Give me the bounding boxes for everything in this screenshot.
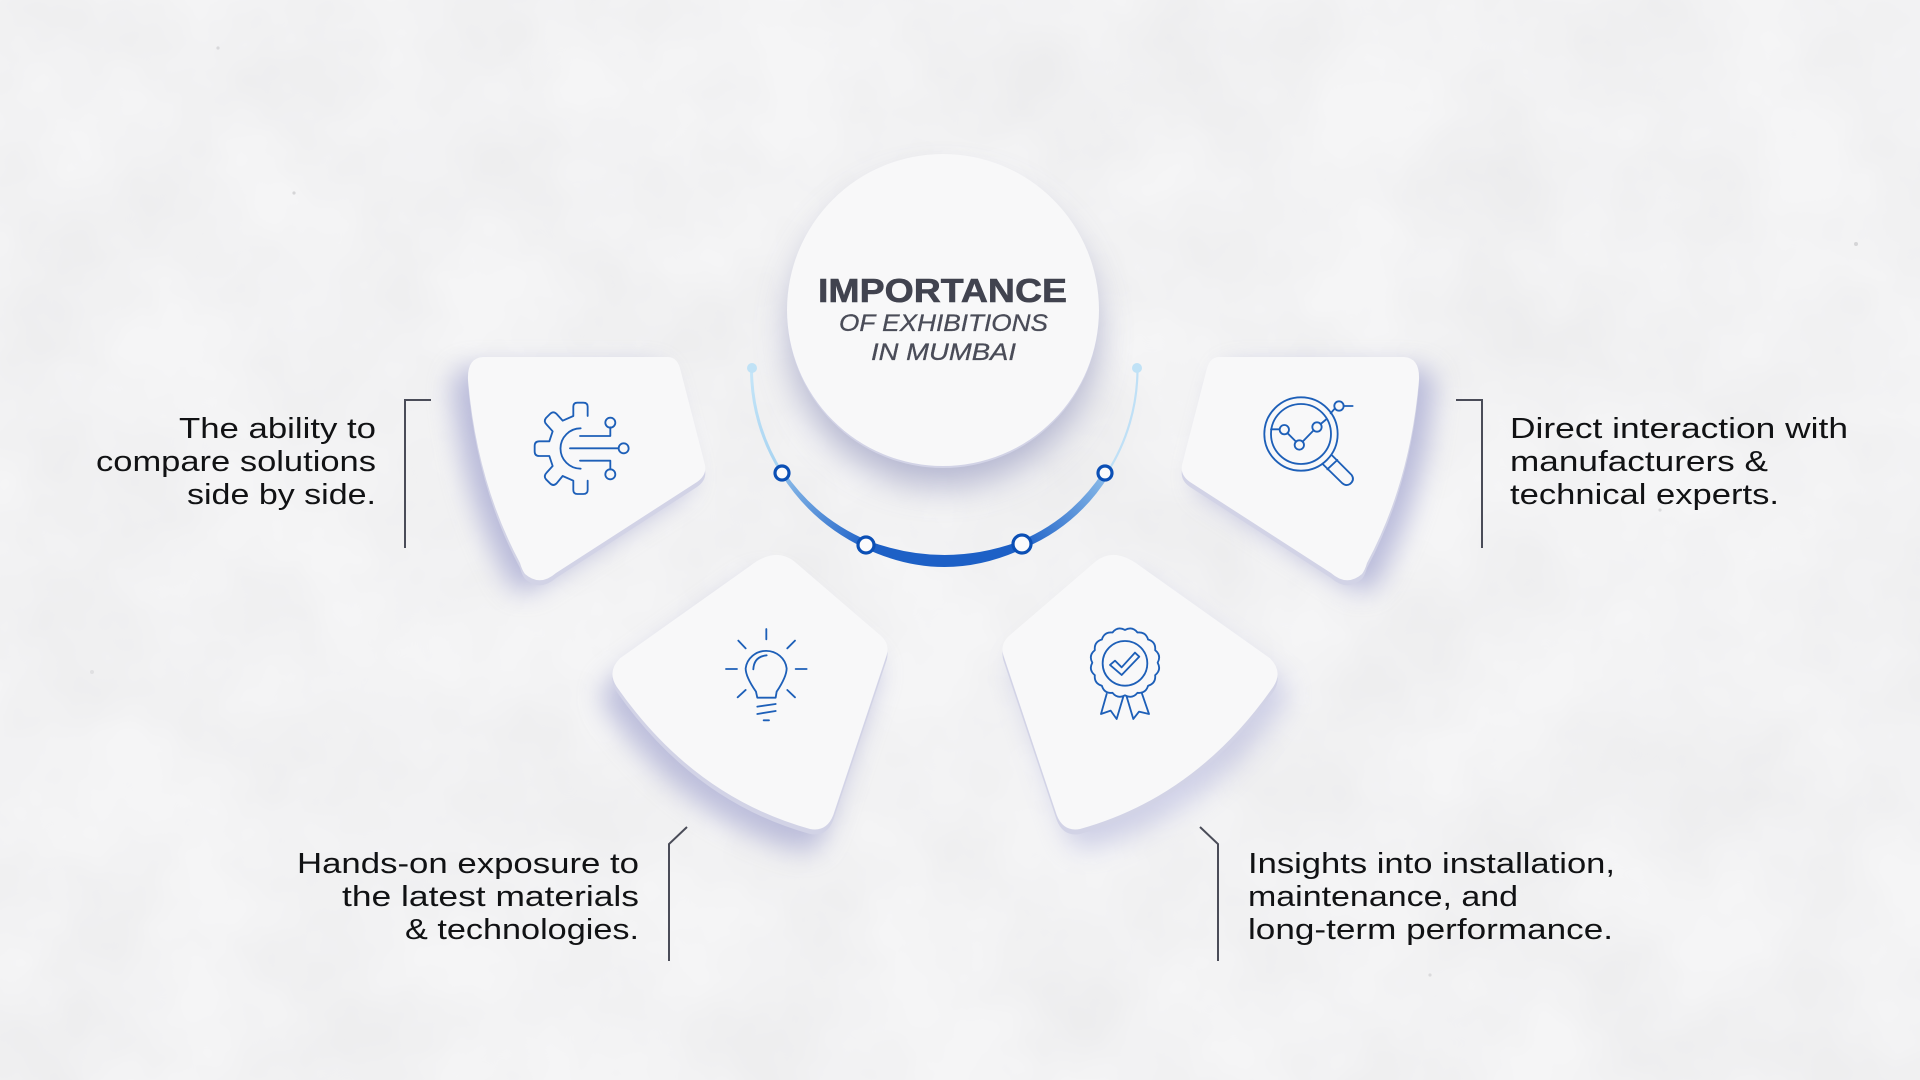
- icon: award rosette with check: [1091, 628, 1159, 719]
- bracket: top right: [1456, 400, 1482, 548]
- icon: magnifier with line chart: [1264, 397, 1353, 485]
- panel: card top left: [453, 357, 705, 591]
- text: compare solutions: side by side.: [187, 479, 376, 511]
- text: direct interaction: technical experts.: [1510, 479, 1779, 511]
- icon: gear with circuit nodes: [535, 403, 629, 494]
- bracket: top left: [405, 400, 431, 548]
- title: IMPORTANCE: [818, 272, 1067, 309]
- text: direct interaction: [1510, 413, 1848, 511]
- chart: curved blue arc with nodes: [747, 363, 1142, 567]
- text: hands-on exposure: Hands-on exposure to: [297, 848, 639, 880]
- text: insights: [1248, 848, 1615, 946]
- text: direct interaction: manufacturers &: [1510, 446, 1768, 478]
- text: hands-on exposure: & technologies.: [405, 914, 639, 946]
- title: IN MUMBAI: [871, 339, 1016, 366]
- text: insights: long-term performance.: [1248, 914, 1613, 946]
- panel: central title circle: [787, 154, 1099, 486]
- text: insights: maintenance, and: [1248, 881, 1518, 913]
- panel: card top right: [1182, 357, 1434, 591]
- text: compare solutions: [96, 413, 376, 511]
- text: direct interaction: Direct interaction with: [1510, 413, 1848, 445]
- text: compare solutions: The ability to: [179, 413, 376, 445]
- panel: card bottom left: [602, 555, 888, 851]
- panel: card bottom right: [1002, 555, 1288, 849]
- text: compare solutions: compare solutions: [96, 446, 376, 478]
- icon: light bulb: [726, 629, 807, 720]
- bracket: bottom left: [669, 827, 687, 961]
- text: hands-on exposure: the latest materials: [342, 881, 639, 913]
- title: [818, 272, 1067, 366]
- bracket: bottom right: [1200, 827, 1218, 961]
- title: OF EXHIBITIONS: [839, 310, 1049, 337]
- text: hands-on exposure: [297, 848, 639, 946]
- text: insights: Insights into installation,: [1248, 848, 1615, 880]
